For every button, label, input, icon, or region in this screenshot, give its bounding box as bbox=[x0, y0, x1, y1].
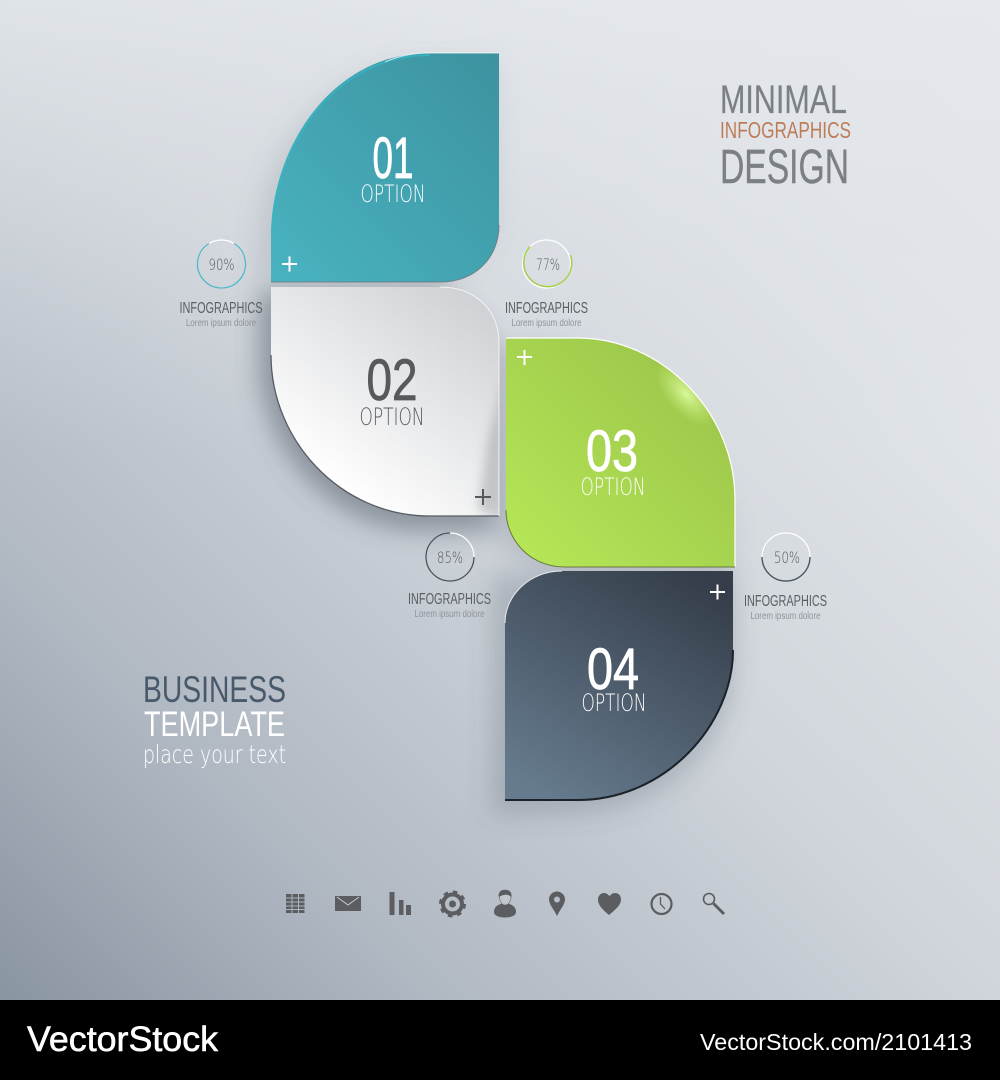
plus bbox=[710, 584, 725, 600]
heading: minimal infographics design bbox=[720, 78, 851, 194]
watermark left: VectorStock bbox=[27, 1020, 219, 1059]
label option: OPTION bbox=[360, 403, 424, 431]
stat 77% bbox=[505, 240, 588, 329]
icon: magnifier bbox=[704, 894, 724, 914]
heading: business template bbox=[143, 669, 286, 769]
label option: OPTION bbox=[360, 180, 426, 208]
soft shadows behind leaves bbox=[258, 62, 735, 815]
stat 77%: 77% bbox=[536, 255, 560, 274]
icon: person bbox=[494, 890, 516, 918]
stat 77%: INFOGRAPHICS bbox=[505, 300, 588, 317]
stat 90%: 90% bbox=[208, 255, 234, 274]
icon: bars bbox=[390, 892, 411, 915]
leaf 04 bbox=[505, 571, 733, 800]
heading: business template: TEMPLATE bbox=[144, 705, 285, 744]
leaf 03 bbox=[506, 338, 735, 567]
icon: heart bbox=[598, 893, 621, 915]
stat 85% bbox=[408, 533, 491, 620]
heading: business template: BUSINESS bbox=[143, 669, 286, 710]
plus bbox=[517, 350, 532, 365]
leaf 02 bbox=[271, 287, 505, 520]
stat 50% bbox=[744, 533, 827, 622]
icon: envelope bbox=[335, 896, 361, 911]
heading: business template: place your text bbox=[143, 740, 286, 769]
label option: OPTION bbox=[580, 473, 646, 501]
heading: minimal infographics design: MINIMAL bbox=[720, 78, 847, 122]
plus bbox=[282, 256, 297, 272]
watermark right: VectorStock.com/2101413 bbox=[700, 1029, 972, 1055]
leaf 01 bbox=[271, 53, 499, 282]
icon: clock bbox=[652, 894, 672, 914]
icon: grid bbox=[286, 894, 304, 913]
number 03: 03 bbox=[586, 419, 638, 484]
stat 85%: INFOGRAPHICS bbox=[408, 591, 491, 608]
stat 50%: INFOGRAPHICS bbox=[744, 593, 827, 610]
icon: map pin bbox=[549, 892, 565, 916]
stat 90% bbox=[180, 240, 262, 329]
stat 77%: Lorem ipsum dolore bbox=[512, 317, 582, 329]
number 04: 04 bbox=[587, 637, 639, 702]
footer bar bbox=[0, 1000, 1000, 1080]
heading: minimal infographics design: INFOGRAPHICS bbox=[720, 117, 851, 143]
stat 90%: Lorem ipsum dolore bbox=[186, 317, 256, 329]
stat 85%: Lorem ipsum dolore bbox=[414, 608, 485, 620]
number 02: 02 bbox=[366, 348, 418, 413]
stat 85%: 85% bbox=[437, 548, 463, 567]
number 01: 01 bbox=[372, 126, 414, 191]
stat 90%: INFOGRAPHICS bbox=[180, 300, 262, 317]
icon: gear bbox=[440, 892, 464, 916]
stat 50%: Lorem ipsum dolore bbox=[750, 610, 821, 622]
stat 50%: 50% bbox=[774, 548, 800, 567]
plus bbox=[475, 489, 491, 505]
label option: OPTION bbox=[582, 689, 646, 717]
icon row bbox=[286, 890, 724, 918]
heading: minimal infographics design: DESIGN bbox=[720, 141, 849, 194]
